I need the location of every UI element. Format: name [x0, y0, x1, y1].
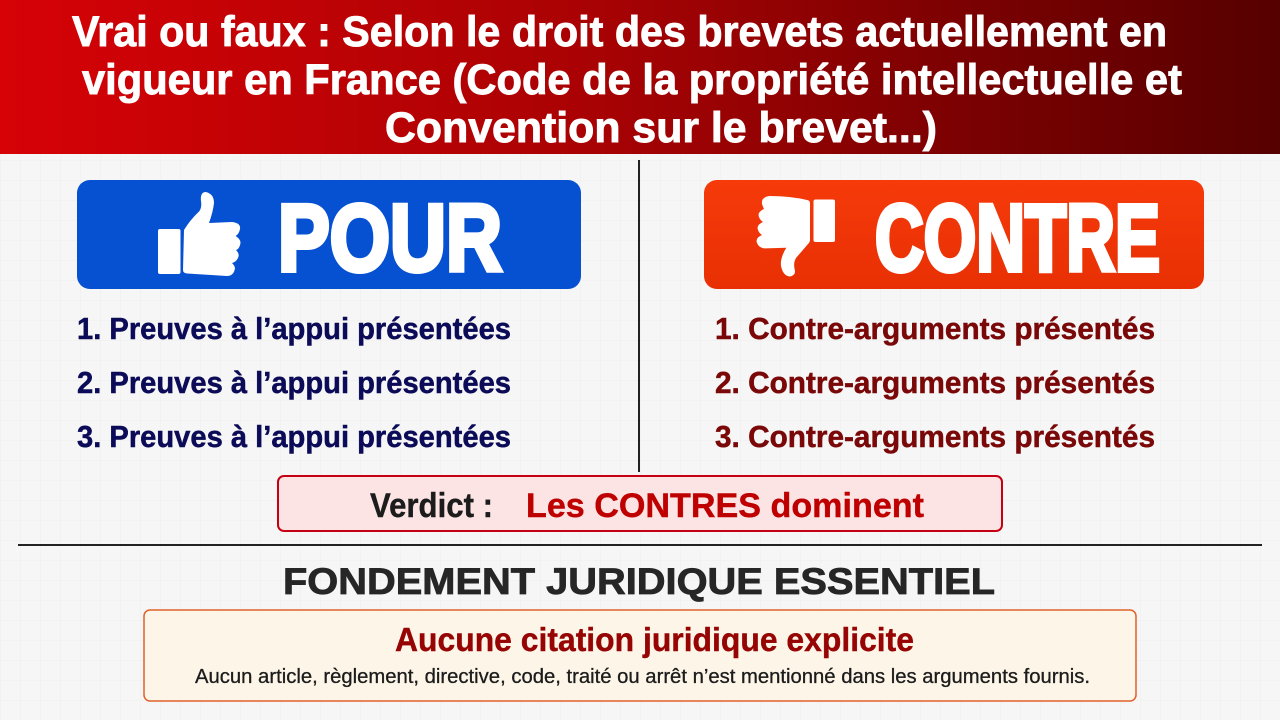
- pour arguments list: 2. Preuves à l’appui présentées: [77, 365, 511, 400]
- pour header badge: [77, 180, 581, 292]
- legal basis heading: FONDEMENT JURIDIQUE ESSENTIEL: [283, 561, 995, 602]
- pour arguments list: 3. Preuves à l’appui présentées: [77, 419, 511, 454]
- panel: contre: [704, 180, 1204, 454]
- verdict callout: [278, 476, 1002, 531]
- title banner: Vrai ou faux : Selon le droit des brevets actuellement en: [72, 8, 1167, 56]
- verdict callout: Verdict :: [370, 487, 493, 525]
- panel: pour: [77, 180, 581, 454]
- pour arguments list: [77, 311, 511, 454]
- contre arguments list: 3. Contre-arguments présentés: [715, 419, 1155, 454]
- contre header badge: [704, 180, 1204, 292]
- legal basis callout: Aucun article, règlement, directive, code, traité ou arrêt n’est mentionné dans les arguments fournis.: [195, 666, 1090, 688]
- pour arguments list: 1. Preuves à l’appui présentées: [77, 311, 511, 346]
- icon: thumbs down: [757, 196, 835, 276]
- icon: thumbs up: [158, 192, 240, 276]
- title banner: Convention sur le brevet...): [385, 104, 937, 152]
- verdict callout: Les CONTRES dominent: [526, 487, 924, 525]
- title banner: vigueur en France (Code de la propriété intellectuelle et: [82, 56, 1182, 104]
- legal basis callout: Aucune citation juridique explicite: [395, 621, 914, 658]
- title banner: [0, 0, 1280, 154]
- contre arguments list: 1. Contre-arguments présentés: [715, 311, 1155, 346]
- contre header badge: CONTRE: [875, 186, 1160, 292]
- contre arguments list: 2. Contre-arguments présentés: [715, 365, 1155, 400]
- contre arguments list: [715, 311, 1155, 454]
- pour header badge: POUR: [278, 186, 502, 292]
- legal basis callout: [144, 610, 1136, 701]
